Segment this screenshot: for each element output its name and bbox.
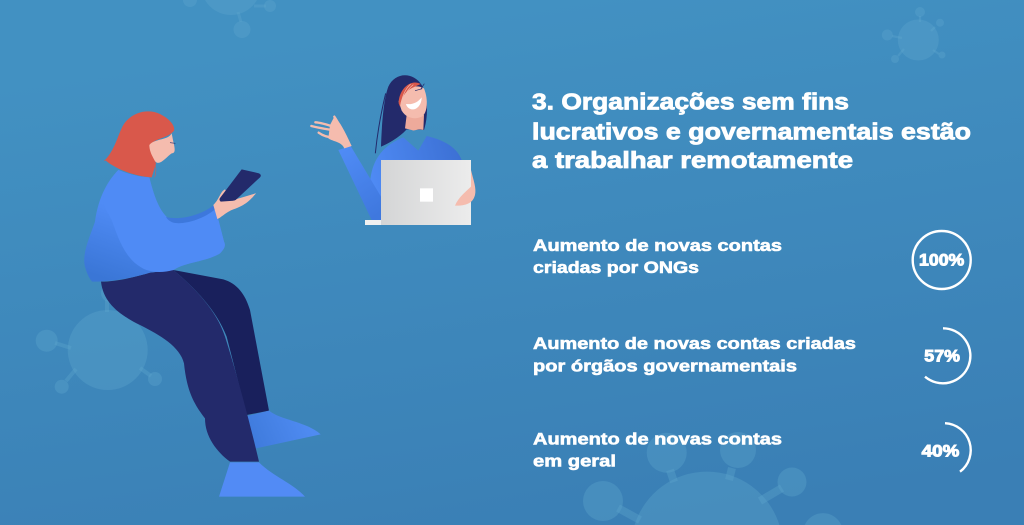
hair [105,111,174,177]
fringe highlights [401,84,413,103]
stat row 3 gauge: 40%: 40% [922,442,959,461]
stat row 2 gauge: 57% [924,328,970,383]
hand on laptop [455,170,475,206]
stat row 1 label [533,236,782,277]
front shoe [219,462,305,497]
raised arm [338,146,381,220]
hair strands [104,138,156,177]
stat row 3 label: Aumento de novas contas [533,430,782,448]
hair strand [375,93,386,153]
face [147,133,175,163]
face [399,86,427,118]
virus: top centre [183,0,276,38]
laptop base [365,220,382,225]
title: a trabalhar remotamente [532,147,853,173]
raised hand [311,117,352,148]
figure: seated woman with phone [84,111,321,497]
phone [219,169,261,202]
fringe [399,83,421,107]
title [532,88,971,173]
sweater [370,136,462,220]
front leg [101,270,259,462]
back leg [173,270,269,415]
stat row 2 label [533,334,856,376]
stat row 1 label: Aumento de novas contas [533,236,782,255]
sleeve [103,170,225,272]
stat row 3 label: em geral [533,452,616,471]
stat row 1 label: criadas por ONGs [533,258,699,277]
back shoe [247,411,321,448]
sweater [84,170,225,282]
hair [381,75,427,147]
virus: left, behind figure [36,284,162,394]
laptop logo [420,188,433,202]
figure: woman with laptop [311,75,475,225]
eye [415,84,424,91]
neck [405,115,424,130]
inner sleeve [166,205,215,223]
stat row 2 gauge: 57%: 57% [924,347,960,366]
virus: bottom [583,432,841,525]
laptop [381,160,471,225]
title: lucrativos e governamentais estão [532,118,971,144]
fingers on phone [232,193,256,204]
stat row 3 gauge: 40% [922,423,971,472]
virus: top right [882,7,946,63]
stat row 3 label [533,430,782,471]
stat row 1 gauge: 100%: 100% [919,251,964,270]
stat row 2 label: por órgãos governamentais [533,356,797,376]
title: 3. Organizações sem fins [532,88,849,114]
stat row 2 label: Aumento de novas contas criadas [533,334,856,353]
stat row 1 gauge: 100% [913,231,971,289]
smile [406,97,422,109]
hand [213,189,256,219]
eyelash [170,142,175,144]
